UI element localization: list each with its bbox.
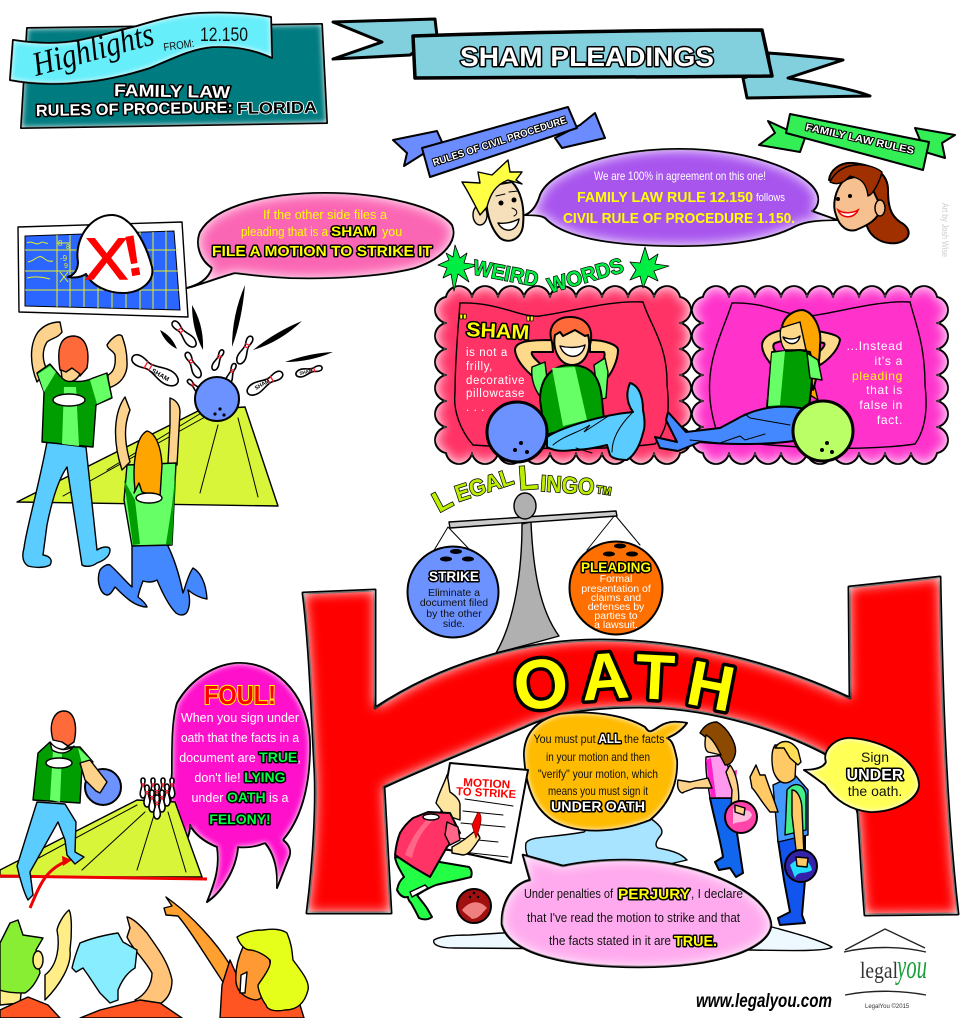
ball [85,769,121,805]
scale with definitions [408,493,662,653]
bowling lane bottom [0,800,207,908]
description text: frilly, [466,361,493,373]
person: green hair [0,910,71,1018]
arm right [107,335,127,388]
description text: is not a [466,347,508,359]
foul heading: FOUL! [204,680,276,710]
character: woman relaxing [655,310,840,451]
foul text: When you sign under [181,711,299,725]
description text: ...Instead [847,339,903,353]
description text: . . . [466,402,485,414]
hair [134,431,162,497]
line 1: We are 100% in agreement on this one! [594,169,766,183]
definition ball: strike [408,546,498,638]
heading: LegalLingo: TM [596,484,612,498]
arm left [116,397,130,470]
document lines [444,799,513,857]
description text: false in [859,398,903,412]
bubble text: in your motion and then [546,750,650,764]
description text [847,339,903,427]
scoreboard numbers: 8 [58,239,63,248]
arm [80,760,107,793]
speech bubble: foul [163,663,310,902]
description text: fact. [877,413,903,427]
bubble text [534,731,664,814]
declare: , I declare [691,886,743,901]
sham word: SHAM [466,319,530,344]
speech bubble: perjury declaration [502,855,771,967]
logo word you: you [895,949,927,986]
character: blond man face [462,160,523,241]
back badge [46,758,72,768]
header line: florida: FLORIDA [237,100,318,118]
line 2: FAMILY LAW RULE 12.150 [577,189,753,206]
sham quote close: " [526,313,534,332]
definition: side. [443,618,465,630]
logo: LegalYou [844,929,927,1010]
you: you [382,225,402,239]
impact spikes [160,285,333,362]
audience [0,897,308,1018]
puddle base [434,927,832,951]
scoreboard numbers row 2: -9 [60,254,68,263]
logo word legal: legal [860,958,898,983]
bubble text: "verify" your motion, which [538,767,658,781]
oath letter H: H [681,646,741,726]
website url: www.legalyou.com [696,991,832,1012]
panel: sham pillow [435,286,691,464]
definition: document filed [420,597,488,609]
scoreboard: 8 [66,244,70,251]
word weird: WEIRD [471,256,540,292]
description text: that is [866,383,903,397]
scale stand [496,522,559,653]
foul text: don't lie! LYING [194,769,286,785]
bubble text: You must put ALL the facts [534,731,664,746]
character: woman with pink ball [678,722,757,877]
scoreboard: 9 [64,263,68,270]
definition: Eliminate a [428,587,480,599]
bubble text: the oath. [848,783,902,799]
ribbon tail left [333,19,437,59]
definition: presentation of [581,583,651,595]
red arrow [30,861,67,908]
definition [581,573,651,631]
speech bubble: file a motion [187,193,453,288]
declaration line 1: Under penalties of [524,886,613,901]
ribbon: rules of civil procedure [393,107,605,177]
description text [466,347,525,414]
definition [420,587,488,630]
bowling lane top [17,407,278,506]
definition: defenses by [588,601,645,613]
character: woman signing [395,775,481,919]
ribbon main [413,30,772,78]
description text: decorative [466,375,525,387]
pin label: SHAM [254,378,271,392]
line 2 follows: follows [756,192,785,204]
puddle of water [434,818,832,951]
heading: weird words [438,245,669,298]
bubble text: UNDER [846,767,904,784]
definition ball: pleading [570,542,662,634]
description text: pleading [852,369,903,383]
heading: LegalLingo: EGAL [452,463,517,507]
pillow seam [455,302,668,449]
bowling ball dark red [457,889,491,923]
speech bubble: sign under the oath [804,738,919,812]
pin [245,368,285,398]
document title line 2: TO STRIKE [456,786,517,801]
panel: highlights header [10,13,327,128]
character: man relaxing [515,317,644,460]
declaration line 3: the facts stated in it are [549,933,671,948]
line 3: CIVIL RULE OF PROCEDURE 1.150. [563,210,795,227]
scale strings [433,515,640,552]
arm left [32,322,62,382]
heading: LegalLingo: INGO [540,470,595,500]
sham word: SHAM [331,223,376,239]
shirt [37,364,112,447]
person: blonde woman pointing [164,897,308,1018]
character: bowler [17,711,121,900]
ribbon: family law rules [759,114,955,170]
label: from: FROM: [163,38,195,54]
heading: LegalLingo: L [517,459,540,498]
scale beam [449,511,617,528]
pin label: SHAM [299,368,313,376]
pin [183,351,203,379]
pants [23,442,110,567]
hair [59,336,88,376]
neck [50,742,74,753]
scale knob [514,493,536,519]
foul line [0,876,207,879]
heading: LegalLingo: L [427,483,458,519]
document: motion to strike [435,763,528,863]
oath archway [303,577,958,915]
pin [235,335,255,365]
foul text: document are TRUE, [179,749,301,765]
header line: rules of procedure: RULES OF PROCEDURE: [36,100,233,120]
pin label: SHAM [150,368,170,383]
pin [295,364,323,378]
panel: pleading pillow [655,286,948,464]
red arch [303,577,958,915]
definition: Formal [600,573,632,585]
teal header plate [21,24,327,128]
header line: family law: FAMILY LAW [114,81,231,102]
legs [655,407,815,451]
person: blue hair [72,917,182,1018]
rule number: 12.150 [200,25,248,46]
neck [61,368,80,381]
definition: parties to [594,610,638,622]
X! text: X [85,227,128,292]
description text: it's a [874,354,903,368]
character: man cheering [23,322,127,567]
pillow body [692,286,948,464]
definition: by the other [426,608,482,620]
foul text: FELONY! [209,811,271,827]
hair [51,711,76,746]
logo copyright: LegalYou ©2015 [865,1003,910,1010]
true word: TRUE. [674,933,717,950]
credit: art by Josh Wise: Art by Josh Wise [940,203,950,257]
logo underline [845,991,926,995]
pin [129,351,181,389]
character: woman cheering [98,397,207,615]
pants [98,544,207,615]
bowling pins cluster [140,778,175,819]
pin [186,378,204,396]
foul text [179,711,301,827]
term: PLEADING [581,559,651,575]
bubble line 1: If the other side files a [263,208,387,222]
ribbon tail right [743,53,870,98]
ribbon label: RULES OF CIVIL PROCEDURE [432,115,568,169]
definition: a lawsuit. [594,619,638,631]
legs [17,802,84,900]
back badge [53,394,85,406]
bowling ball [195,377,239,421]
speech bubble: strike [68,215,152,293]
oath letter A: A [579,637,631,715]
bowling ball green [793,401,853,461]
shirt [124,463,176,546]
perjury word: PERJURY [618,886,690,903]
document title: MOTION [463,777,510,791]
ribbon label: FAMILY LAW RULES [804,122,915,157]
pin [211,349,225,371]
character: brunette woman face [829,163,909,243]
foul text: under OATH is a [191,789,289,805]
script: Highlights: Highlights [28,16,158,84]
back badge [136,493,162,503]
bubble text [846,749,904,799]
heading: LegalLingo [427,459,612,519]
speech bubble: all the facts [524,713,687,830]
shirt [33,742,93,803]
bubble text: UNDER OATH [551,799,645,814]
bubble line 3: FILE A MOTION TO STRIKE IT [212,243,432,260]
word words: WORDS [545,254,626,298]
bubble text: Sign [861,749,889,765]
definition: claims and [591,592,641,604]
logo roof [844,929,926,952]
oath letter T: T [634,640,676,714]
exclamation: ! [118,223,148,290]
bubble text: means you must sign it [548,784,649,798]
star right [630,247,669,288]
speech bubble: agreement [525,149,837,246]
sham quotes: " [459,311,467,330]
declaration line 2: that I've read the motion to strike and that [527,910,740,925]
character: man with blue ball [750,742,817,925]
foul text: oath that the facts in a [181,731,299,745]
pillow seam [709,302,926,448]
pin [224,363,238,385]
banner: sham pleadings title [333,19,870,98]
pillow body [435,286,691,464]
legs [547,383,644,460]
bowling ball blue [487,402,547,462]
bowling ball and flying pins [129,285,333,421]
scoreboard [18,215,188,317]
bubble line 2: pleading that is a [241,225,328,239]
highlight ribbon [10,13,272,84]
arm right [168,398,180,465]
pin [170,319,198,349]
star left [438,245,478,291]
description text: pillowcase [466,388,525,400]
oath letter O: O [508,642,573,726]
term: STRIKE [429,568,479,584]
title text: SHAM PLEADINGS [460,42,714,72]
